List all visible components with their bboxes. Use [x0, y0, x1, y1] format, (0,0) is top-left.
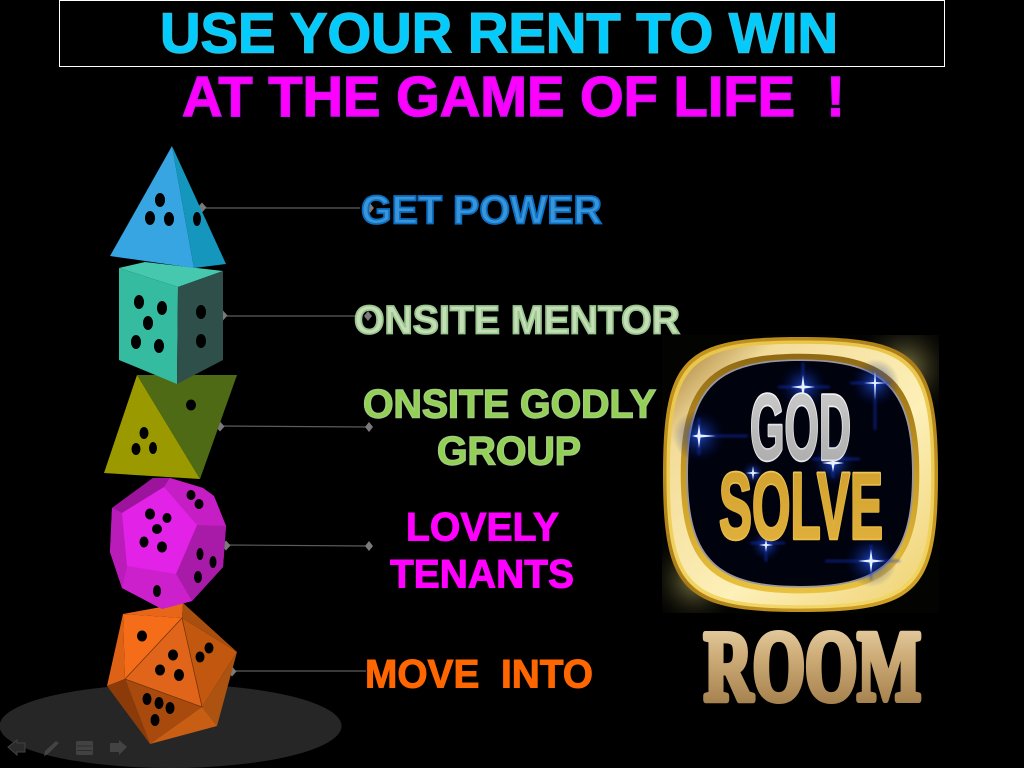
badge word: god	[750, 374, 851, 480]
die: cube teal	[119, 262, 223, 384]
title line 2: AT THE GAME OF LIFE !	[182, 65, 845, 129]
die: dodecahedron magenta	[110, 478, 226, 609]
badge: god solve: GOD	[750, 374, 851, 480]
label: onsite mentor: ONSITE MENTOR	[354, 298, 680, 342]
icon: back arrow	[8, 740, 25, 755]
label: onsite godly group	[363, 382, 656, 474]
label: move into: MOVE INTO	[365, 652, 593, 696]
label: onsite godly group: ONSITE GODLY	[363, 382, 656, 426]
badge: god solve: GOD	[750, 374, 851, 480]
title line 1: USE YOUR RENT TO WIN	[160, 2, 838, 66]
icon: forward arrow	[110, 740, 127, 755]
room wordmark: ROOM	[704, 610, 921, 722]
title box	[60, 0, 944, 66]
die: icosahedron orange	[107, 603, 237, 744]
label: lovely tenants: TENANTS	[390, 552, 574, 596]
label: lovely tenants: LOVELY	[406, 506, 559, 550]
icon: menu	[76, 741, 93, 755]
label: lovely tenants	[390, 506, 574, 596]
connector diamonds	[198, 202, 374, 676]
badge word: solve	[719, 454, 883, 560]
die: pyramid blue	[110, 146, 226, 268]
label: onsite godly group: GROUP	[437, 430, 581, 474]
ground shadow ellipse	[0, 684, 342, 768]
die: tetrahedron olive	[104, 375, 237, 479]
icon: pencil	[44, 741, 59, 756]
sparkles	[673, 359, 900, 587]
connector lines	[202, 208, 369, 671]
label: get power: GET POWER	[361, 188, 602, 232]
badge: god solve	[662, 335, 939, 613]
navigation icons	[8, 740, 127, 756]
